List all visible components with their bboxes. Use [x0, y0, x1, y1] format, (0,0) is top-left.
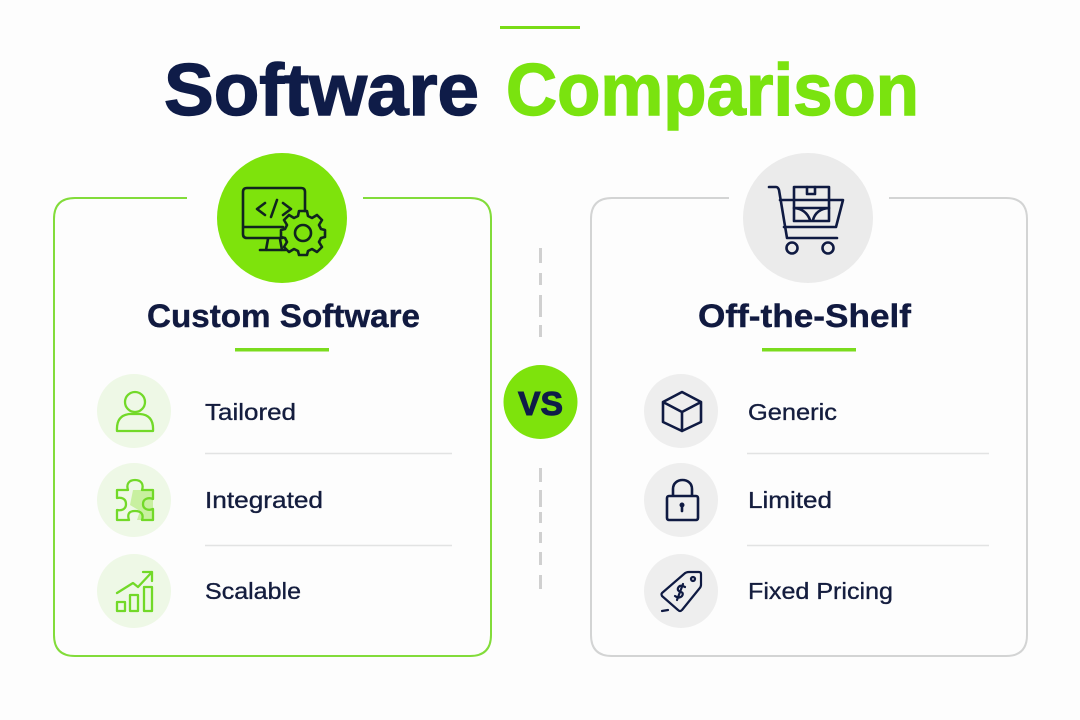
heading underline [762, 348, 856, 352]
heading underline [235, 348, 329, 352]
item: fixed pricing [644, 554, 893, 628]
divider: upper dashes [539, 248, 542, 337]
item: scalable: Scalable [205, 578, 301, 604]
item: tailored: Tailored [205, 399, 296, 425]
item: generic [644, 374, 837, 448]
card outline: off-the-shelf [591, 198, 1027, 656]
vs badge [504, 365, 578, 439]
title [164, 50, 919, 131]
divider: lower dashes [539, 468, 542, 589]
card outline: custom software [54, 198, 491, 656]
title: Software [164, 50, 479, 131]
item: tailored [97, 374, 296, 448]
title: Comparison [506, 50, 919, 131]
item: integrated: Integrated [205, 487, 323, 513]
item: limited: Limited [748, 487, 832, 513]
title accent line [500, 26, 580, 29]
icon: monitor with gear [217, 153, 347, 283]
heading: custom software: Custom Software [147, 298, 420, 334]
item: scalable [97, 554, 301, 628]
item: limited [644, 463, 832, 537]
vs badge: VS [518, 385, 563, 422]
icon: shopping cart [743, 153, 873, 283]
item: integrated [97, 463, 323, 537]
panel: custom software [54, 153, 491, 656]
item: fixed pricing: Fixed Pricing [748, 578, 893, 604]
panel: off-the-shelf [591, 153, 1027, 656]
item: generic: Generic [748, 399, 837, 425]
heading: off-the-shelf: Off-the-Shelf [698, 298, 911, 334]
